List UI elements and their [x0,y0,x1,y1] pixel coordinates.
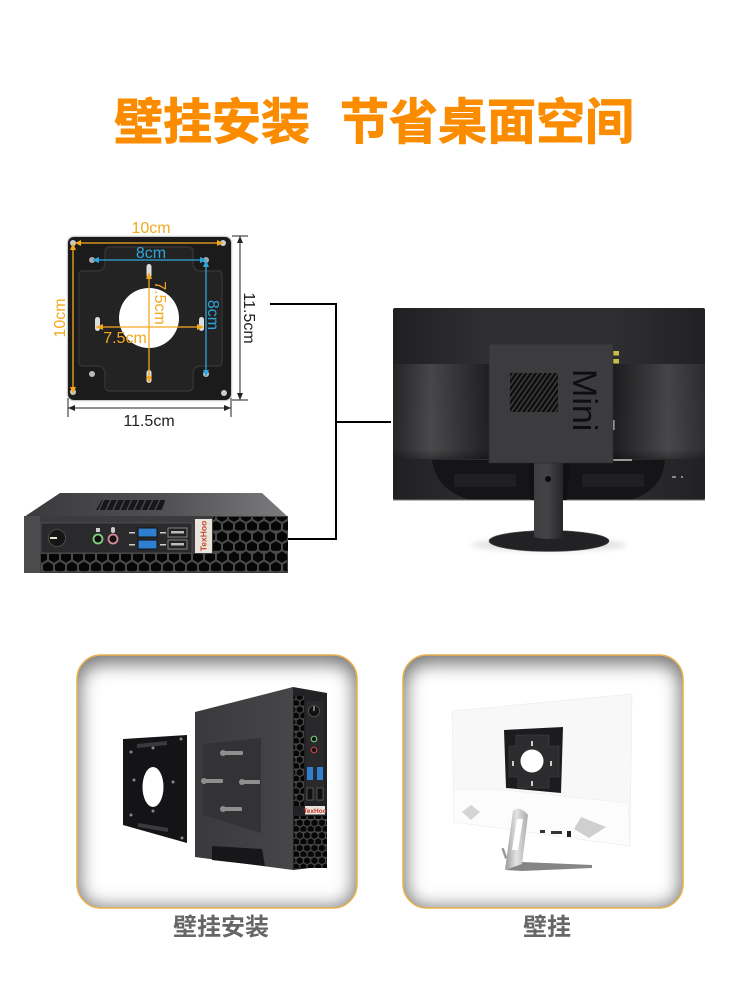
mounting plate diagram with dimensions [52,220,257,430]
dimension: black 11.5cm [68,236,248,417]
audio jacks [94,527,118,544]
antenna connectors [613,351,619,364]
dimension labels [52,220,257,430]
dimension labels: 7.5cm [151,281,168,325]
caption: right panel: 壁挂 [523,914,571,941]
rear bulge band [393,364,705,459]
title: 壁挂安装 [114,96,310,150]
panel: wall mounted on monitor [402,654,684,909]
white monitor [452,694,632,846]
Mini text: Mini [565,369,603,431]
mounting screws [201,750,260,812]
tower front [293,687,327,870]
dimension labels: 10cm [52,298,69,338]
panel: wall mounting [76,654,358,909]
USB ports [129,528,187,549]
mini PC front view [24,493,288,573]
bracket on monitor [504,727,563,793]
dimension labels: 8cm [136,245,166,262]
dimension labels: 7.5cm [103,330,147,347]
bracket plate [123,735,187,843]
plate: black bracket [67,236,232,401]
dimension labels: 8cm [204,300,221,330]
dimension labels: 10cm [131,220,171,237]
title: 节省桌面空间 [340,96,634,150]
foot [212,846,265,866]
mini PC tower: TexHoo [303,808,327,815]
port panel [41,523,192,553]
brand label: TexHoo [198,521,208,551]
dimension: orange 10cm and 7.5cm [70,240,223,394]
hex mesh [41,554,287,572]
top vent [96,500,165,510]
metal stand [501,809,592,871]
mini PC tower [195,687,327,870]
monitor rear with mini PC mounted [393,308,705,552]
lower housing [432,460,665,500]
brand label [195,519,212,553]
power button [48,530,66,546]
stand [471,463,627,552]
connector lines [270,304,391,539]
mini PC box [489,344,613,463]
dimension labels: 11.5cm [123,413,175,430]
vent mesh [510,373,558,412]
dimension labels: 11.5cm [240,292,257,344]
caption: left panel: 壁挂安装 [173,914,269,941]
dimension: blue 8cm [92,257,209,377]
title [114,96,634,150]
